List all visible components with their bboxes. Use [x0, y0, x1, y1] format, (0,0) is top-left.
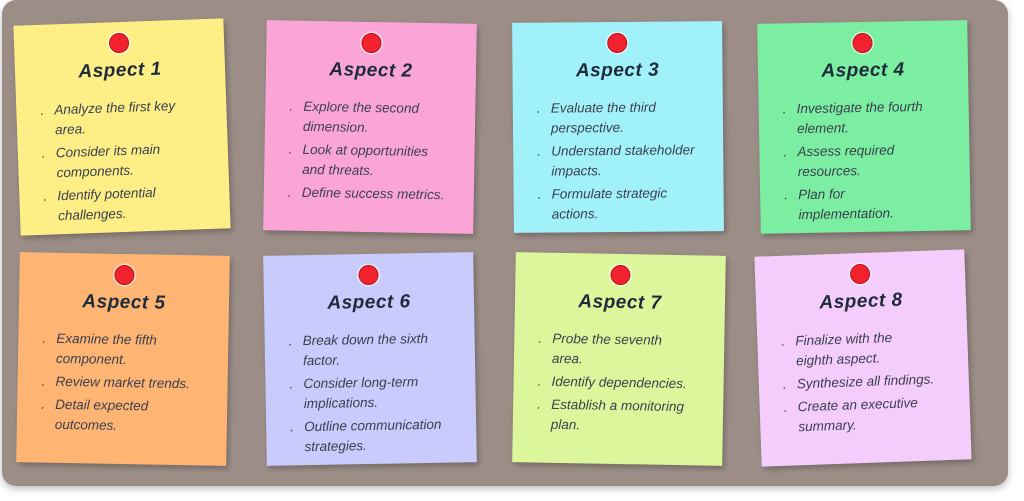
- list: Define success metrics.: [302, 185, 445, 202]
- note: aspect 5: [16, 252, 230, 466]
- list: Probe the seventh: [552, 331, 662, 348]
- list: [782, 330, 934, 434]
- list: component.: [56, 351, 127, 367]
- list: Establish a monitoring: [551, 397, 684, 414]
- list: challenges.: [58, 206, 127, 223]
- heading: Aspect 4: [821, 59, 905, 82]
- note: aspect 1: [13, 18, 231, 236]
- note: aspect 6: [263, 252, 477, 466]
- list: perspective.: [551, 120, 624, 136]
- pin: [850, 264, 870, 284]
- list: Explore the second: [303, 99, 419, 116]
- list: Detail expected: [55, 397, 148, 413]
- list: Review market trends.: [55, 374, 190, 391]
- list: Examine the fifth: [56, 331, 157, 348]
- list: Synthesize all findings.: [797, 372, 934, 391]
- list: [42, 331, 190, 433]
- list: implications.: [304, 395, 378, 411]
- note: aspect 7: [512, 252, 726, 466]
- list: [288, 99, 445, 202]
- list: Finalize with the: [795, 330, 892, 348]
- list: Create an executive: [797, 395, 918, 414]
- note: aspect 2: [263, 20, 477, 234]
- list: area.: [55, 121, 86, 137]
- heading: Aspect 7: [578, 291, 662, 314]
- list: eighth aspect.: [796, 350, 880, 368]
- list: element.: [797, 120, 849, 136]
- list: implementation.: [798, 205, 894, 222]
- list: [783, 99, 923, 222]
- list: and threats.: [302, 162, 374, 178]
- note: aspect 4: [757, 20, 971, 234]
- pin: [358, 265, 379, 285]
- list: Plan for: [798, 186, 845, 202]
- list: Assess required: [797, 142, 894, 159]
- list: strategies.: [304, 438, 367, 454]
- list: impacts.: [551, 163, 602, 179]
- list: dimension.: [303, 119, 368, 135]
- heading: Aspect 8: [819, 290, 903, 313]
- heading: Aspect 1: [78, 59, 162, 82]
- list: plan.: [551, 417, 580, 432]
- list: [538, 331, 687, 432]
- list: Look at opportunities: [302, 142, 428, 159]
- list: area.: [552, 351, 583, 366]
- pin: [109, 33, 129, 53]
- list: Evaluate the third: [551, 100, 656, 116]
- pin: [607, 33, 627, 53]
- list: outcomes.: [55, 417, 117, 433]
- list: Formulate strategic: [552, 186, 667, 202]
- list: Identify dependencies.: [551, 374, 687, 391]
- heading: Aspect 2: [329, 59, 413, 82]
- list: Understand stakeholder: [551, 142, 695, 159]
- heading: Aspect 5: [82, 291, 166, 314]
- pin: [852, 33, 873, 53]
- list: [289, 331, 442, 454]
- list: Break down the sixth: [303, 331, 428, 348]
- list: [41, 98, 176, 223]
- list: [537, 100, 695, 222]
- note: aspect 3: [512, 21, 724, 233]
- list: Investigate the fourth: [797, 99, 923, 116]
- pin: [114, 265, 135, 285]
- pin: [361, 33, 382, 53]
- heading: Aspect 3: [576, 60, 659, 81]
- note: aspect 8: [754, 249, 972, 467]
- list: Outline communication: [304, 417, 442, 434]
- list: components.: [56, 163, 134, 180]
- list: Consider its main: [56, 142, 160, 160]
- list: actions.: [552, 206, 598, 222]
- list: resources.: [798, 163, 861, 179]
- list: Consider long-term: [303, 374, 418, 391]
- list: factor.: [303, 353, 340, 368]
- heading: Aspect 6: [327, 291, 411, 314]
- list: Identify potential: [57, 185, 156, 203]
- list: summary.: [798, 417, 857, 434]
- pin: [610, 265, 631, 285]
- list: Analyze the first key: [54, 98, 175, 117]
